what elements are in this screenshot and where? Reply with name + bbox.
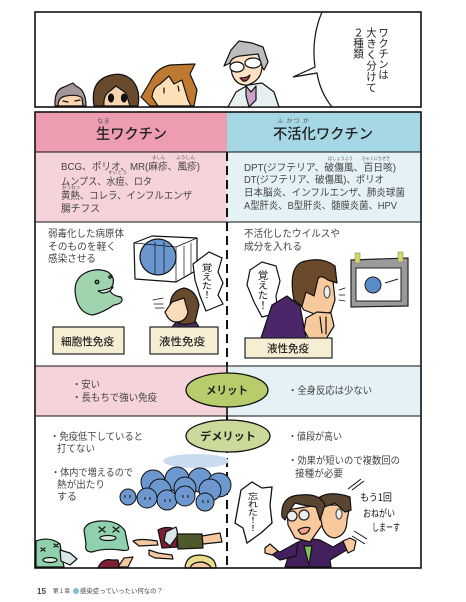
panel: top manga strip [35, 12, 421, 107]
list: inactivated vaccines: DPT(ジフテリア、破傷風、百日咳) [244, 161, 396, 174]
list: inactivated vaccines: 日本脳炎、インフルエンザ、肺炎球菌 [244, 186, 405, 199]
icon: caged virus [134, 236, 197, 282]
list: live vaccines: ふうしん [176, 155, 196, 161]
handwritten text: one more shot please: もう1回 [360, 489, 392, 504]
list: inactivated vaccines [227, 152, 421, 222]
speech bubble: forgot: 忘れた！！ [246, 492, 260, 532]
action lines [348, 479, 367, 544]
demerit text: live vaccine: ・体内で増えるので [51, 466, 133, 479]
header: live vaccine [35, 112, 227, 152]
merit text: live vaccine [72, 379, 157, 404]
header: inactivated vaccine: ふ かつ か [277, 118, 309, 125]
list: inactivated vaccines: はしょうふう [328, 156, 353, 162]
speech bubble: remembered [193, 252, 223, 311]
character: thinking man [261, 260, 345, 339]
description text [244, 228, 340, 253]
header: inactivated vaccine [227, 112, 421, 152]
list: live vaccines: 腸チフス [61, 203, 100, 215]
footer: page number and chapter title: 第１章 [53, 587, 70, 595]
panel: inactivated vaccine immunity [244, 228, 408, 358]
merit text: live vaccine: ・安い [72, 379, 100, 391]
demerit text: live vaccine: ・免疫低下していると [50, 430, 143, 443]
speech bubble: remembered: 覚えた！ [256, 269, 270, 310]
character: doctor in white coat [224, 41, 279, 107]
divider: centre dashed line [226, 152, 228, 366]
speech bubble: remembered: 覚えた！ [200, 262, 214, 299]
character: patient with dark brown hair [93, 74, 139, 106]
list: live vaccines: おうねつ [62, 184, 80, 191]
row: demerits [36, 430, 400, 568]
list: live vaccines: 黄熱、コレラ、インフルエンザ [61, 189, 192, 202]
list: live vaccines [35, 152, 227, 222]
description text: 成分を入れる [244, 241, 302, 253]
label: humoral immunity: 液性免疫 [159, 335, 206, 348]
speech text: ワクチンは [377, 27, 389, 80]
header: live vaccine: なま [97, 118, 110, 125]
demerit text: inactivated vaccine: 接種が必要 [295, 467, 343, 480]
handwritten text: one more shot please: しまーす [372, 519, 400, 534]
description text: そのものを軽く [48, 241, 116, 253]
header: inactivated vaccine: 不活化ワクチン [273, 126, 373, 143]
handwritten text: one more shot please [360, 489, 400, 534]
header: live vaccine: 生ワクチン [96, 126, 167, 143]
icon: immune cell person [153, 288, 199, 327]
illustration: fallen green pathogen [84, 521, 129, 552]
merit text: live vaccine: ・長もちで強い免疫 [72, 391, 157, 404]
demerit text: inactivated vaccine: ・効果が短いので複数回の [288, 454, 400, 467]
oval: demerit label [186, 420, 270, 452]
list: live vaccines: ムンプス、水痘、ロタ [61, 176, 152, 188]
label: humoral immunity: 液性免疫 [267, 342, 309, 355]
oval: merit label: メリット [206, 385, 248, 397]
icon: green weakened pathogen [75, 270, 122, 315]
list: live vaccines: ましん [152, 155, 165, 161]
demerit text: inactivated vaccine [288, 430, 400, 480]
panel: comparison table [35, 112, 421, 568]
speech text [352, 26, 389, 93]
oval: merit label [186, 373, 268, 407]
description text: 不活化したウイルスや [244, 228, 340, 240]
illustration: virus swarm [120, 454, 231, 511]
demerit text: live vaccine: する [57, 491, 77, 503]
list: live vaccines: BCG、ポリオ、MR(麻疹、風疹) [61, 161, 200, 173]
speech bubble [293, 12, 332, 107]
demerit text: live vaccine [50, 430, 143, 503]
illustration: fallen green pathogen at edge [36, 539, 77, 567]
footer: page number and chapter title: 感染症っていったい何なの？ [80, 586, 163, 595]
demerit text: live vaccine: 打てない [57, 442, 95, 455]
list: inactivated vaccines: DT(ジフテリア、破傷風)、ポリオ [244, 173, 384, 186]
character: small patient with grey-purple hair [55, 83, 86, 106]
row: merits [35, 366, 421, 416]
label: humoral immunity [150, 327, 218, 354]
description text: 感染させる [48, 252, 96, 265]
list: live vaccines: すいとう [108, 169, 127, 176]
label: cellular immunity: 細胞性免疫 [61, 335, 115, 348]
footer: page number and chapter title [37, 586, 163, 596]
panel: live vaccine immunity [48, 227, 223, 354]
character: patient with orange hair [141, 64, 197, 106]
demerit text: inactivated vaccine: ・値段が高い [288, 430, 342, 443]
handwritten text: one more shot please: おねがい [363, 505, 395, 520]
icon: framed virus picture [351, 252, 408, 307]
oval: demerit label: デメリット [200, 429, 256, 443]
label: humoral immunity [245, 338, 332, 358]
footer: page number and chapter title: 15 [37, 587, 46, 596]
speech text: 大きく分けて [365, 26, 377, 93]
label: cellular immunity [53, 327, 124, 354]
illustration: fallen person [98, 527, 222, 568]
speech bubble: forgot [235, 482, 272, 543]
speech bubble: remembered [247, 262, 280, 317]
description text: 弱毒化した病原体 [48, 227, 124, 240]
demerit text: live vaccine: 熱が出たり [57, 478, 105, 491]
speech text: ２種類 [352, 27, 364, 60]
character: apologetic doctor [265, 494, 356, 567]
merit text: inactivated vaccine: ・全身反応は少ない [288, 384, 372, 397]
list: inactivated vaccines: A型肝炎、B型肝炎、髄膜炎菌、HPV [244, 199, 397, 212]
list: inactivated vaccines: ひゃくにちぜき [362, 156, 390, 162]
description text [48, 227, 124, 265]
table outline [35, 112, 421, 568]
